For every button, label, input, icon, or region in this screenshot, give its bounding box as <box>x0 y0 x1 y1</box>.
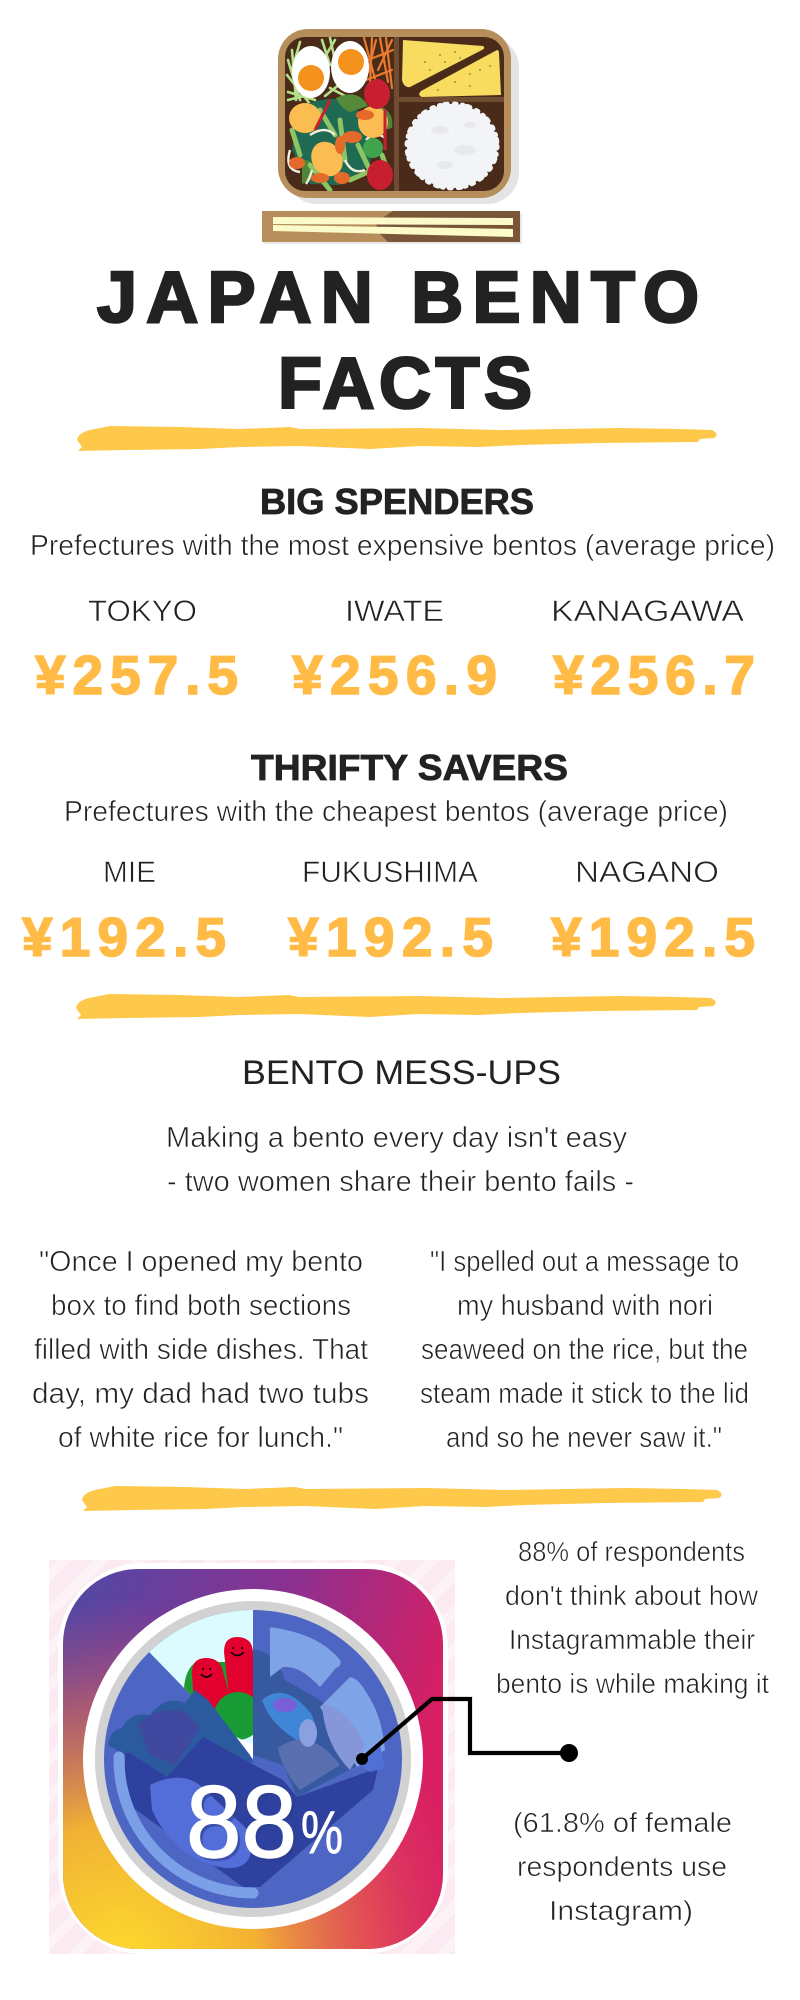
quote: left: box to find both sections <box>51 1290 351 1322</box>
text: female respondents: respondents use <box>517 1851 727 1882</box>
quote: left: day, my dad had two tubs <box>32 1378 369 1410</box>
stat: Nagano: ¥192.5 <box>551 906 755 968</box>
subheading: Prefectures with the most expensive bentos (average price) <box>30 530 775 562</box>
salad <box>288 94 392 190</box>
boiled eggs <box>292 41 369 98</box>
intro text: Making a bento every day isn't easy <box>166 1122 627 1154</box>
stat: Fukushima <box>288 856 493 968</box>
text: female respondents: (61.8% of female <box>513 1807 732 1838</box>
brush divider <box>76 994 716 1019</box>
stat: Iwate: ¥256.9 <box>292 644 497 706</box>
text: instagram stat: bento is while making it <box>496 1668 769 1699</box>
stat: Nagano <box>551 856 755 968</box>
chopstick mat <box>262 211 522 244</box>
text: female respondents: Instagram) <box>549 1895 693 1926</box>
stat: Mie: MIE <box>103 856 156 889</box>
rice <box>407 104 497 188</box>
stat: Nagano: NAGANO <box>575 856 719 889</box>
stat: Mie <box>22 856 226 968</box>
stat: Kanagawa <box>551 595 755 706</box>
text: instagram stat: Instagrammable their <box>509 1624 755 1655</box>
connector arrow <box>356 1699 578 1765</box>
section: thrifty savers <box>22 747 755 968</box>
brush divider <box>77 426 717 451</box>
stat: Mie: ¥192.5 <box>22 906 226 968</box>
title: FACTS <box>278 344 532 424</box>
stat: Iwate: IWATE <box>345 595 444 628</box>
quote: right: and so he never saw it." <box>446 1422 722 1454</box>
percentage label: 88 <box>189 1768 300 1882</box>
quote: left: "Once I opened my bento <box>39 1246 363 1278</box>
omelette slices <box>402 40 501 97</box>
text: instagram stat: don't think about how <box>505 1580 759 1611</box>
heading: BENTO MESS-UPS <box>242 1054 561 1092</box>
heading: BIG SPENDERS <box>260 481 534 522</box>
radishes <box>364 79 393 190</box>
intro text <box>166 1122 634 1198</box>
quote: right: steam made it stick to the lid <box>420 1378 749 1410</box>
text: instagram stat: 88% of respondents <box>518 1536 745 1567</box>
icon: instagram bento dial with 88% <box>49 1560 455 1954</box>
stat: Tokyo: ¥257.5 <box>35 644 238 706</box>
carrot and lettuce <box>287 38 393 104</box>
stat: Tokyo: TOKYO <box>88 595 197 628</box>
percentage label: % <box>301 1799 343 1866</box>
quote: left <box>32 1246 369 1454</box>
text: female respondents <box>513 1807 732 1926</box>
stat: Kanagawa: ¥256.7 <box>553 644 755 706</box>
stat: Iwate <box>292 595 497 706</box>
quote: left: filled with side dishes. That <box>34 1334 368 1366</box>
stat: Kanagawa: KANAGAWA <box>551 595 744 628</box>
section: bento mess-ups <box>32 1054 749 1454</box>
dial rings <box>83 1589 423 1929</box>
title: JAPAN BENTO <box>97 258 699 338</box>
intro text: - two women share their bento fails - <box>167 1166 634 1198</box>
percentage label: 88 <box>186 1765 297 1879</box>
bento tray <box>278 29 519 204</box>
section: big spenders <box>30 481 775 706</box>
brush divider <box>82 1486 722 1511</box>
heading: THRIFTY SAVERS <box>251 747 568 788</box>
quote: left: of white rice for lunch." <box>58 1422 343 1454</box>
quote: right: "I spelled out a message to <box>430 1246 739 1278</box>
faded bento contents <box>108 1627 385 1893</box>
text: instagram stat <box>496 1536 769 1699</box>
stat: Tokyo <box>35 595 238 706</box>
subheading: Prefectures with the cheapest bentos (average price) <box>64 796 728 828</box>
stat: Fukushima: FUKUSHIMA <box>302 856 478 889</box>
stat: Fukushima: ¥192.5 <box>288 906 493 968</box>
revealed wedge <box>149 1610 253 1759</box>
icon background <box>49 1560 455 1954</box>
quote: right: seaweed on the rice, but the <box>421 1334 748 1366</box>
icon: bento box illustration <box>262 29 522 244</box>
quote: right: my husband with nori <box>457 1290 713 1322</box>
quote: right <box>420 1246 749 1454</box>
title <box>97 258 699 424</box>
